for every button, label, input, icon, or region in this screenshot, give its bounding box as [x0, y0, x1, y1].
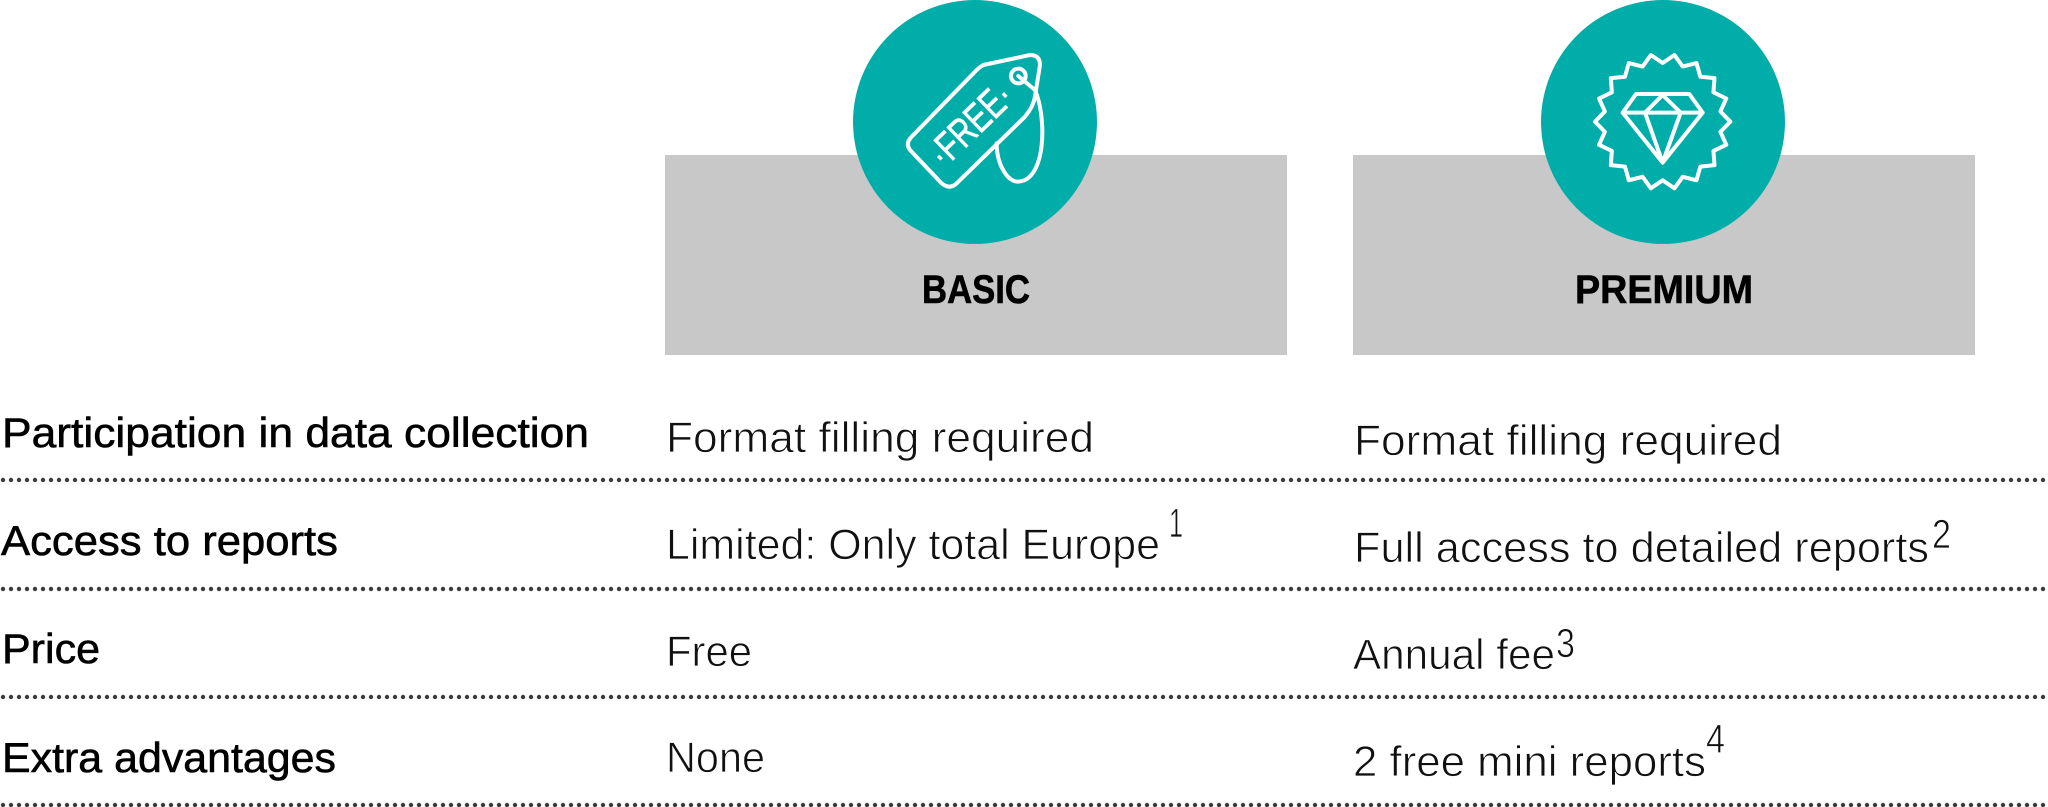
row: participation in data collection: Format filling required — [666, 414, 1094, 462]
icon: diamond badge — [1595, 55, 1730, 188]
row: extra advantages: 4 — [1706, 716, 1725, 762]
row: price: Annual fee — [1353, 631, 1555, 679]
row: participation in data collection — [2, 409, 1782, 465]
icon: free tag: ·FREE· — [918, 73, 1022, 176]
row: price: Free — [666, 628, 752, 676]
row: extra advantages: Extra advantages — [2, 734, 336, 781]
row: extra advantages — [2, 716, 1725, 786]
heading: basic: BASIC — [922, 268, 1030, 312]
row: participation in data collection: Format filling required — [1354, 417, 1782, 465]
row: access to reports: 1 — [1169, 500, 1183, 546]
row: access to reports: Limited: Only total Europe — [666, 521, 1160, 569]
row: extra advantages: None — [666, 734, 765, 782]
panel: basic header — [665, 0, 1287, 355]
row: price — [2, 620, 1575, 679]
row: access to reports: Full access to detailed reports — [1354, 524, 1929, 572]
row: access to reports — [1, 500, 1951, 572]
heading: premium: PREMIUM — [1575, 268, 1753, 312]
panel: premium header — [1353, 0, 1975, 355]
row: extra advantages: 2 free mini reports — [1353, 738, 1706, 786]
row: participation in data collection: Participation in data collection — [2, 409, 589, 456]
row: access to reports: Access to reports — [1, 517, 338, 564]
row: price: Price — [2, 625, 100, 672]
row: access to reports: 2 — [1932, 511, 1951, 557]
row: price: 3 — [1556, 620, 1575, 666]
